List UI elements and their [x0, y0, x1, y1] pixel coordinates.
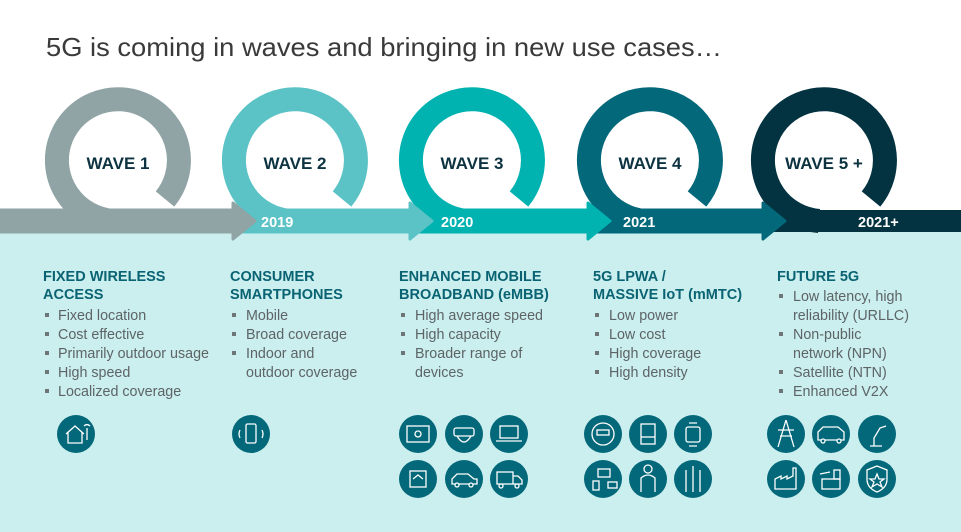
background lower panel — [0, 232, 961, 532]
icons: eMBB devices — [399, 415, 528, 498]
column 3 text: Broader range of — [415, 346, 522, 362]
wave 5 ring and band — [760, 99, 961, 232]
column 2 text: Indoor and — [246, 346, 314, 362]
wave 3 ring and arrow: 2020 — [441, 215, 473, 231]
wave 5 ring and band: 2021+ — [858, 215, 899, 231]
column 1 text: Localized coverage — [58, 384, 181, 400]
column 2 text — [230, 269, 357, 381]
column 1 text: ACCESS — [43, 287, 104, 303]
column 1 text: Fixed location — [58, 308, 146, 324]
column 2 text: CONSUMER — [230, 269, 315, 285]
wave 5 ring and band: WAVE 5 + — [785, 154, 863, 173]
column 5 text: Non-public — [793, 327, 861, 343]
wave 2 ring and arrow — [234, 99, 432, 239]
icons: IoT devices — [584, 415, 712, 498]
icon: house with antenna — [57, 415, 95, 453]
column 3 text: ENHANCED MOBILE — [399, 269, 542, 285]
wave 1 ring and arrow — [0, 99, 255, 239]
column 2 text: Broad coverage — [246, 327, 347, 343]
title: 5G is coming in waves and bringing in new use cases… — [46, 32, 722, 62]
wave 3 ring and arrow: WAVE 3 — [441, 154, 503, 173]
column 5 text: Enhanced V2X — [793, 384, 889, 400]
column 5 text: network (NPN) — [793, 346, 887, 362]
wave 3 ring and arrow — [410, 99, 610, 239]
column 3 text: High average speed — [415, 308, 543, 324]
column 3 text: High capacity — [415, 327, 502, 343]
icon: smartphone — [232, 415, 270, 453]
column 5 text: reliability (URLLC) — [793, 308, 909, 324]
column 1 text: Primarily outdoor usage — [58, 346, 209, 362]
column 4 text: MASSIVE IoT (mMTC) — [593, 287, 742, 303]
column 3 text: devices — [415, 365, 463, 381]
column 5 text: Low latency, high — [793, 289, 902, 305]
column 3 text: BROADBAND (eMBB) — [399, 287, 549, 303]
column 1 text: High speed — [58, 365, 130, 381]
column 2 text: outdoor coverage — [246, 365, 357, 381]
column 4 text: High density — [609, 365, 689, 381]
column 4 text: Low cost — [609, 327, 665, 343]
wave 4 ring and arrow: 2021 — [623, 215, 655, 231]
column 2 text: Mobile — [246, 308, 288, 324]
column 2 text: SMARTPHONES — [230, 287, 343, 303]
wave 2 ring and arrow: WAVE 2 — [264, 154, 326, 173]
column 5 text: Satellite (NTN) — [793, 365, 887, 381]
column 1 text — [43, 269, 209, 400]
wave 1 ring and arrow: WAVE 1 — [87, 154, 149, 173]
wave 4 ring and arrow — [589, 99, 785, 239]
column 4 text: 5G LPWA / — [593, 269, 666, 285]
column 5 text — [777, 269, 909, 400]
column 4 text: High coverage — [609, 346, 701, 362]
wave 2 ring and arrow: 2019 — [261, 215, 293, 231]
column 4 text — [593, 269, 742, 381]
column 1 text: FIXED WIRELESS — [43, 269, 166, 285]
column 4 text: Low power — [609, 308, 678, 324]
icons: future 5G — [767, 415, 896, 498]
wave 4 ring and arrow: WAVE 4 — [619, 154, 682, 173]
column 1 text: Cost effective — [58, 327, 144, 343]
column 5 text: FUTURE 5G — [777, 269, 859, 285]
column 3 text — [399, 269, 549, 381]
